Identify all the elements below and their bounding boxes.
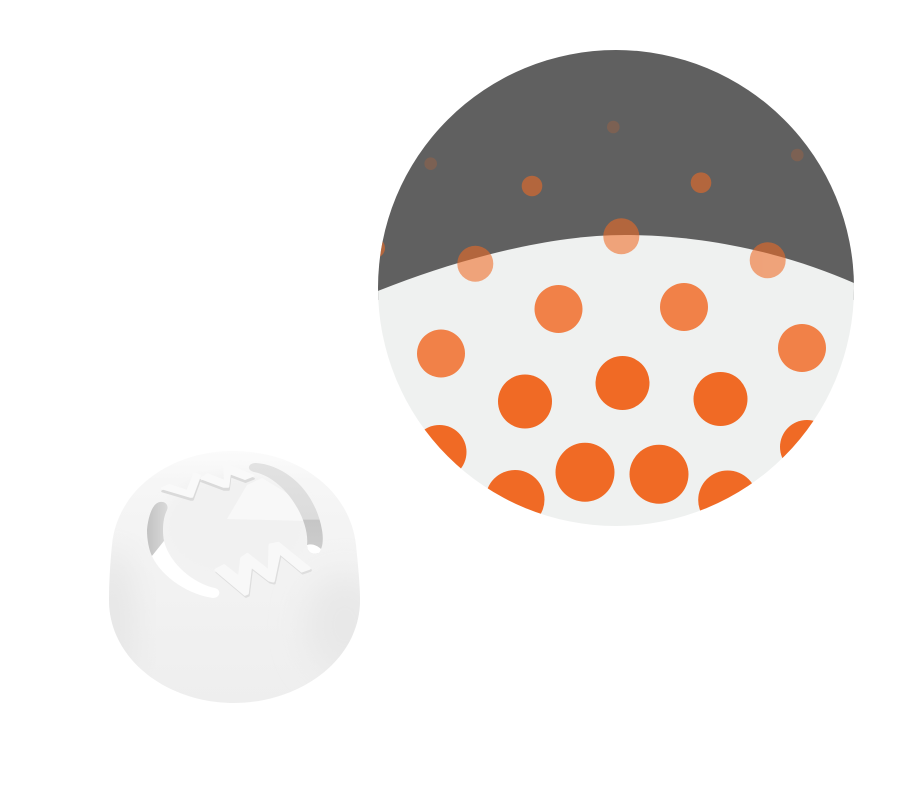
light lower region of circle [378,235,854,526]
dark upper region of circle [378,50,854,300]
bottom logo mark [216,543,310,596]
left slot inner wall [147,502,168,556]
left slot opening [152,541,219,598]
right slot opening [307,544,321,554]
white cap product [109,463,360,703]
right slot [249,463,323,554]
cap body [109,470,360,703]
top face facet [227,478,307,521]
magnified circle: particles in cross-section [365,50,854,530]
top logo mark [162,465,254,500]
semi-opaque particles [417,283,826,378]
solid particles [424,356,814,514]
medium particles in dark region [365,172,711,258]
translucent particles crossing the boundary [457,218,786,282]
faint small particles [424,121,804,170]
